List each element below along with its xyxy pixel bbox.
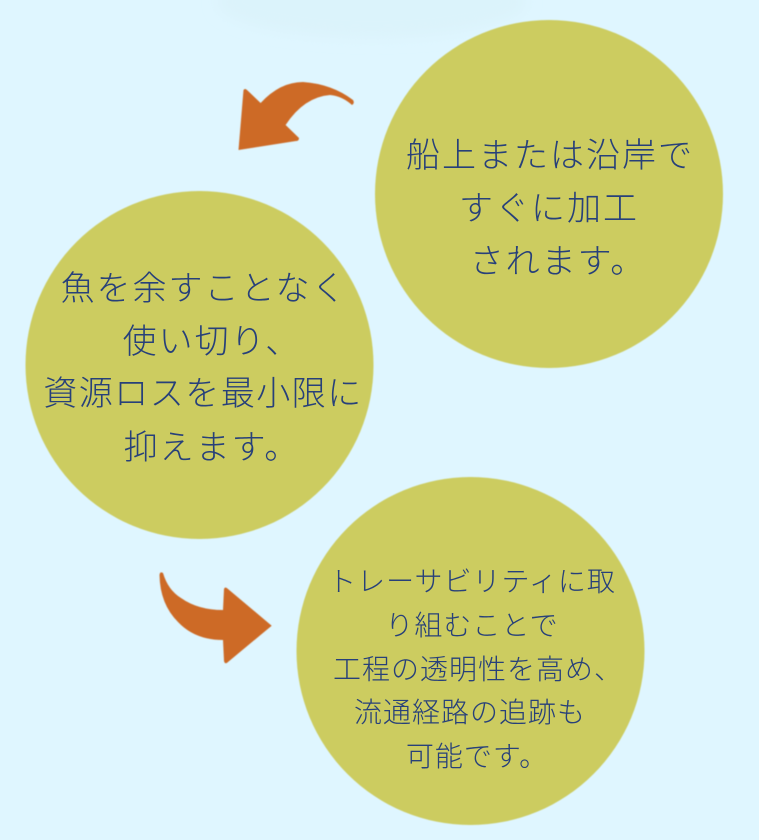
panel: processing circle [375,20,723,368]
text: traceability: 可能です。 [406,741,548,772]
text: processing: 船上または沿岸で [406,137,694,175]
arrow: first to second circle [238,82,354,150]
text: traceability: り組むことで [385,610,559,641]
text: resource loss: 抑えます。 [124,429,300,467]
text: processing: すぐに加工 [459,190,639,228]
text: traceability [328,566,623,772]
text: resource loss: 魚を余すことなく [61,270,347,308]
text: traceability: トレーサビリティに取 [328,566,616,597]
text: processing [406,137,694,281]
text: traceability: 流通経路の追跡も [354,697,586,728]
arrow: second to third circle [160,572,272,663]
text: resource loss: 使い切り、 [123,323,301,361]
text: processing: されます。 [470,243,646,281]
text: resource loss [43,270,363,467]
panel: resource loss circle [26,191,374,539]
text: traceability: 工程の透明性を高め、 [333,654,623,685]
text: resource loss: 資源ロスを最小限に [43,375,363,413]
faded top shape [217,0,527,38]
panel: traceability circle [296,477,644,825]
